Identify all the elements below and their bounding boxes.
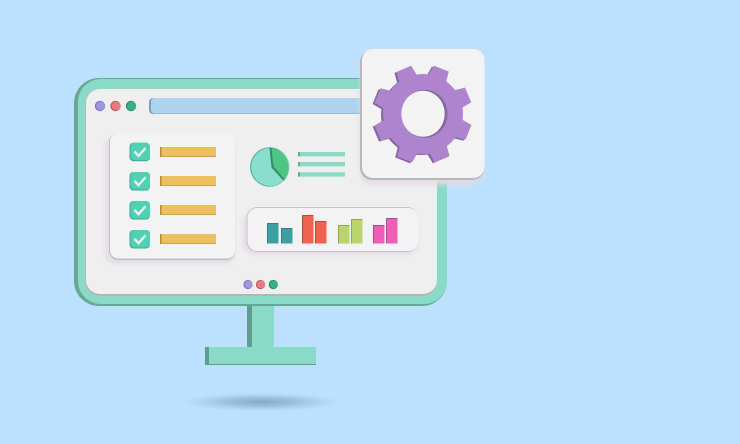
- monitor stand: [205, 300, 316, 365]
- icon: gear: [372, 65, 472, 164]
- panel: gear card: [360, 49, 484, 185]
- panel: checklist: [105, 133, 235, 264]
- green bars: [338, 219, 362, 244]
- ground shadow: [176, 392, 346, 412]
- checkbox row 3: [130, 201, 216, 220]
- panel: bar chart: [243, 207, 418, 255]
- monitor frame: [74, 78, 447, 306]
- teal bars: [267, 223, 292, 244]
- checkbox row 2: [130, 172, 216, 190]
- red bars: [302, 215, 326, 244]
- legend lines: [298, 152, 345, 177]
- checkbox row 4: [130, 230, 216, 248]
- pie chart: [250, 147, 289, 187]
- checkbox row 1: [130, 143, 216, 161]
- pink bars: [373, 218, 398, 244]
- window control dots: [95, 101, 136, 111]
- address bar: [149, 98, 374, 114]
- bottom dots: [243, 280, 278, 289]
